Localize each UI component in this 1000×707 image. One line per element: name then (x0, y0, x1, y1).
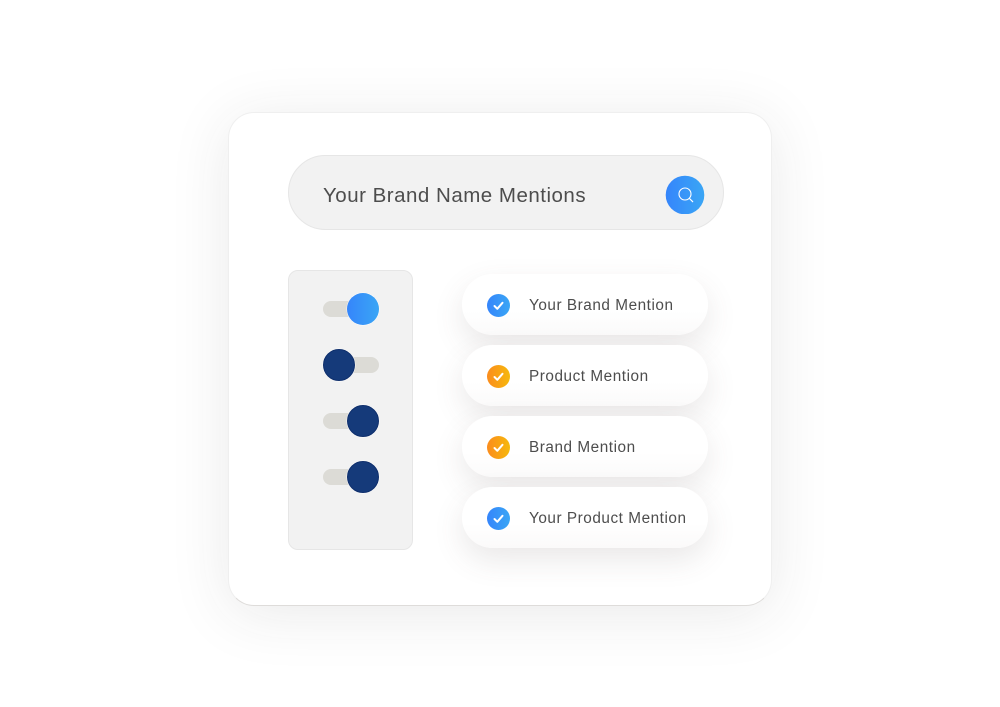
main card (228, 112, 772, 606)
icon: orange check (487, 436, 510, 459)
search bar text: Your Brand Name Mentions (323, 184, 586, 207)
label: Brand Mention (529, 439, 636, 456)
panel: toggles (288, 270, 413, 550)
icon: blue check (487, 507, 510, 530)
toggle 3 (323, 404, 380, 438)
toggle 4 (323, 460, 380, 494)
mention: Brand Mention (462, 416, 708, 477)
search bar (288, 155, 724, 230)
mention: Product Mention (462, 345, 708, 406)
icon: search button (666, 176, 704, 214)
icon: blue check (487, 294, 510, 317)
mention: Your Brand Mention (462, 274, 708, 335)
label: Your Brand Mention (529, 297, 674, 314)
icon: orange check (487, 365, 510, 388)
label: Your Product Mention (529, 510, 687, 527)
mention: Your Product Mention (462, 487, 708, 548)
toggle 2 (322, 348, 379, 382)
toggle 1 (323, 292, 380, 326)
label: Product Mention (529, 368, 649, 385)
